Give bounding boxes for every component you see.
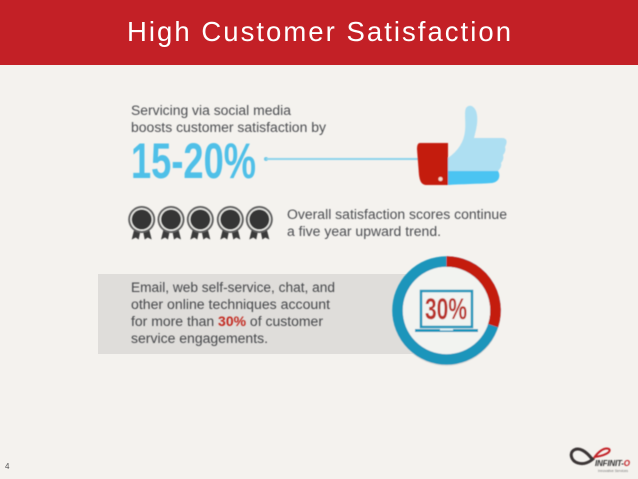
connector line bbox=[264, 157, 418, 161]
icon: thumbs up bbox=[417, 106, 507, 185]
big number: 15-20%: 15-20% bbox=[131, 133, 256, 189]
panel: online engagement band bbox=[98, 274, 413, 354]
logo: Infinit-O: Innovative Services bbox=[598, 469, 628, 473]
donut chart: 30% bbox=[392, 258, 500, 366]
text: satisfaction trend: Overall satisfaction scores continue bbox=[287, 207, 507, 222]
medal 5 bbox=[246, 206, 273, 240]
text: online techniques: Email, web self-service, chat, and bbox=[131, 280, 335, 295]
text: social media intro bbox=[131, 103, 326, 135]
text: online techniques bbox=[131, 280, 335, 346]
icon row: five award medals bbox=[128, 206, 273, 240]
page number: 4 bbox=[5, 462, 10, 471]
medal 2 bbox=[158, 206, 184, 240]
medal 1 bbox=[128, 206, 155, 240]
title banner bbox=[0, 0, 638, 65]
logo: Infinit-O: INFINIT-O bbox=[595, 459, 631, 468]
text: social media intro: boosts customer satisfaction by bbox=[131, 120, 326, 135]
title banner: High Customer Satisfaction bbox=[127, 16, 511, 47]
logo: Infinit-O bbox=[571, 449, 631, 473]
text: online techniques: other online techniques account bbox=[131, 297, 330, 312]
text: social media intro: Servicing via social media bbox=[131, 103, 291, 118]
medal 4 bbox=[217, 206, 244, 240]
icon: laptop: 30% bbox=[425, 293, 467, 326]
text: satisfaction trend bbox=[287, 207, 507, 239]
text: online techniques: service engagements. bbox=[131, 331, 268, 346]
text: satisfaction trend: a five year upward trend. bbox=[287, 224, 441, 239]
text: online techniques: for more than 30% of customer bbox=[131, 314, 324, 329]
medal 3 bbox=[187, 206, 214, 240]
